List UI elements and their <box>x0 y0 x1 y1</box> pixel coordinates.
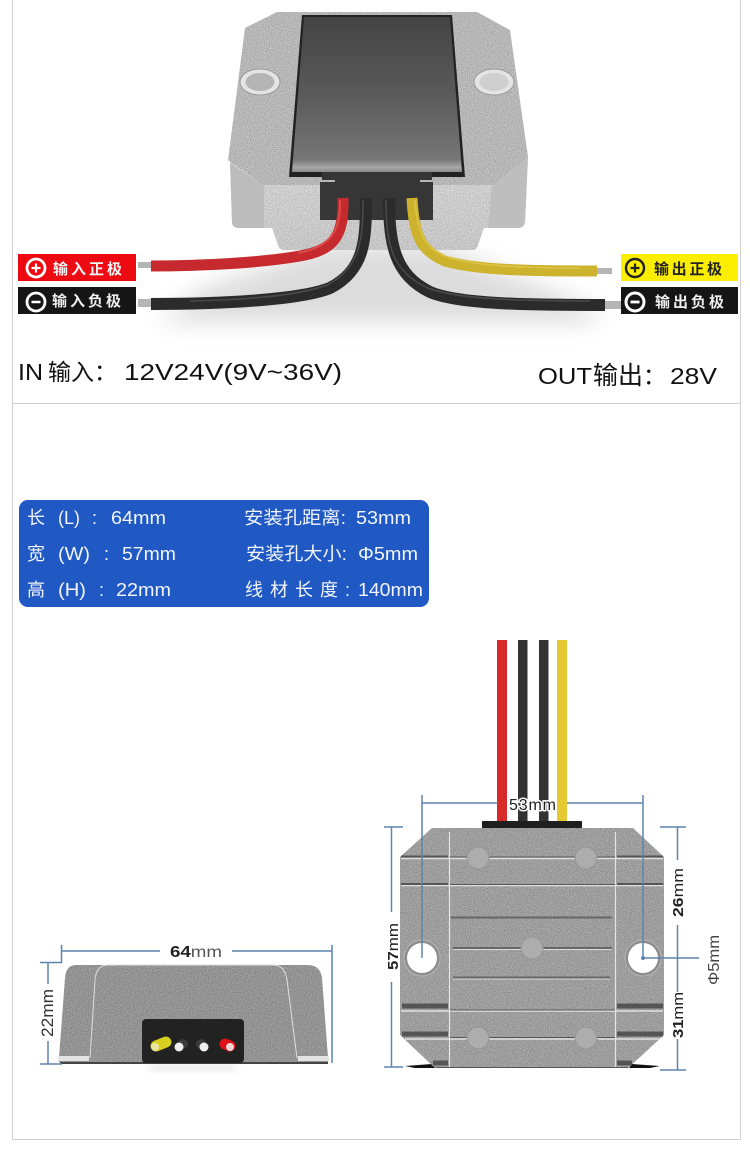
spec rows: 安装孔大小: <box>246 544 347 564</box>
spec rows: : <box>92 508 97 528</box>
left mounting hole <box>404 940 440 976</box>
spec rows: (L) <box>58 508 80 528</box>
spec rows: (H) <box>58 580 86 600</box>
mounting hole left <box>240 69 280 95</box>
output voltage text: ： <box>643 363 666 389</box>
spec rows: : <box>345 580 350 600</box>
yellow terminal <box>151 1042 166 1051</box>
spec rows: 线材长度 <box>245 580 338 600</box>
spec rows: Φ5mm <box>358 544 418 564</box>
spec rows: 安装孔距离: <box>244 508 346 528</box>
output voltage text: 28V <box>670 363 718 389</box>
spec rows <box>27 508 423 600</box>
wire bundle <box>482 640 582 829</box>
57mm dimension <box>384 827 403 1067</box>
exposed wire tips <box>138 262 621 309</box>
5mm hole dimension: Φ5mm <box>706 935 723 985</box>
centre panel edges <box>450 832 616 1068</box>
yellow wire <box>412 198 597 271</box>
spec panel <box>19 500 429 607</box>
label: output positive: 输出正极 <box>654 260 722 278</box>
output voltage text: 输出 <box>593 362 643 390</box>
label: input negative <box>18 287 136 314</box>
input voltage text <box>18 359 342 385</box>
side view body <box>59 965 328 1062</box>
input voltage text: IN <box>18 359 43 385</box>
spec rows: 长 <box>27 508 45 528</box>
wire connector <box>320 172 433 220</box>
spec rows: 140mm <box>358 580 423 600</box>
input voltage text: 输入 <box>48 359 94 385</box>
shadow wedges under body <box>405 1064 660 1068</box>
black terminal 1 <box>174 1039 188 1052</box>
22mm dimension: 22mm <box>38 989 57 1037</box>
label: output negative: 输出负极 <box>655 293 724 311</box>
26mm dimension: 26mm <box>670 868 687 917</box>
spec rows: 22mm <box>116 580 171 600</box>
spec rows: : <box>99 580 104 600</box>
input voltage text: 12V24V(9V~36V) <box>124 359 342 385</box>
product photo: converter with wires <box>138 12 621 322</box>
rivets <box>467 847 597 1049</box>
red terminal <box>225 1043 234 1051</box>
spec rows: : <box>104 544 109 564</box>
label: output positive <box>621 254 738 281</box>
mounting hole right <box>474 69 514 95</box>
input voltage text: ： <box>94 359 117 385</box>
57mm dimension: 57mm <box>385 923 402 970</box>
side view base strips <box>58 1056 329 1064</box>
22mm dimension <box>38 962 62 1064</box>
31mm dimension: 31mm <box>670 992 687 1038</box>
side view ground shadow <box>150 1066 235 1070</box>
black wire negative out <box>386 198 605 305</box>
black wire negative in <box>151 198 366 304</box>
side view drawing <box>38 944 332 1070</box>
front view body <box>400 828 664 1068</box>
red wire <box>151 198 343 266</box>
side view connector <box>142 1019 244 1063</box>
spec rows: (W) <box>58 544 90 564</box>
spec rows: 53mm <box>356 508 411 528</box>
label: input positive: 输入正极 <box>53 260 122 278</box>
output voltage text: OUT <box>538 363 592 389</box>
26mm dimension <box>660 827 687 992</box>
output voltage text <box>538 362 718 390</box>
spec rows: 57mm <box>122 544 176 564</box>
spec rows: 宽 <box>27 544 45 564</box>
31mm dimension <box>660 992 687 1070</box>
label: output negative <box>621 287 738 314</box>
device window <box>289 15 465 177</box>
spec rows: 高 <box>27 580 45 600</box>
53mm dimension: 53mm <box>509 797 556 814</box>
label: input negative: 输入负极 <box>52 292 121 310</box>
ribs <box>401 856 663 1068</box>
label: input positive <box>18 254 136 281</box>
64mm dimension <box>40 944 332 1063</box>
right mounting hole <box>625 940 661 976</box>
5mm hole dimension <box>641 935 723 985</box>
53mm dimension <box>422 795 643 958</box>
front view drawing <box>384 640 723 1070</box>
side view centre panel outline <box>90 965 297 1058</box>
64mm dimension: 64mm <box>170 944 222 961</box>
device housing <box>228 12 528 250</box>
black terminal 2 <box>196 1039 208 1052</box>
spec rows: 64mm <box>111 508 166 528</box>
